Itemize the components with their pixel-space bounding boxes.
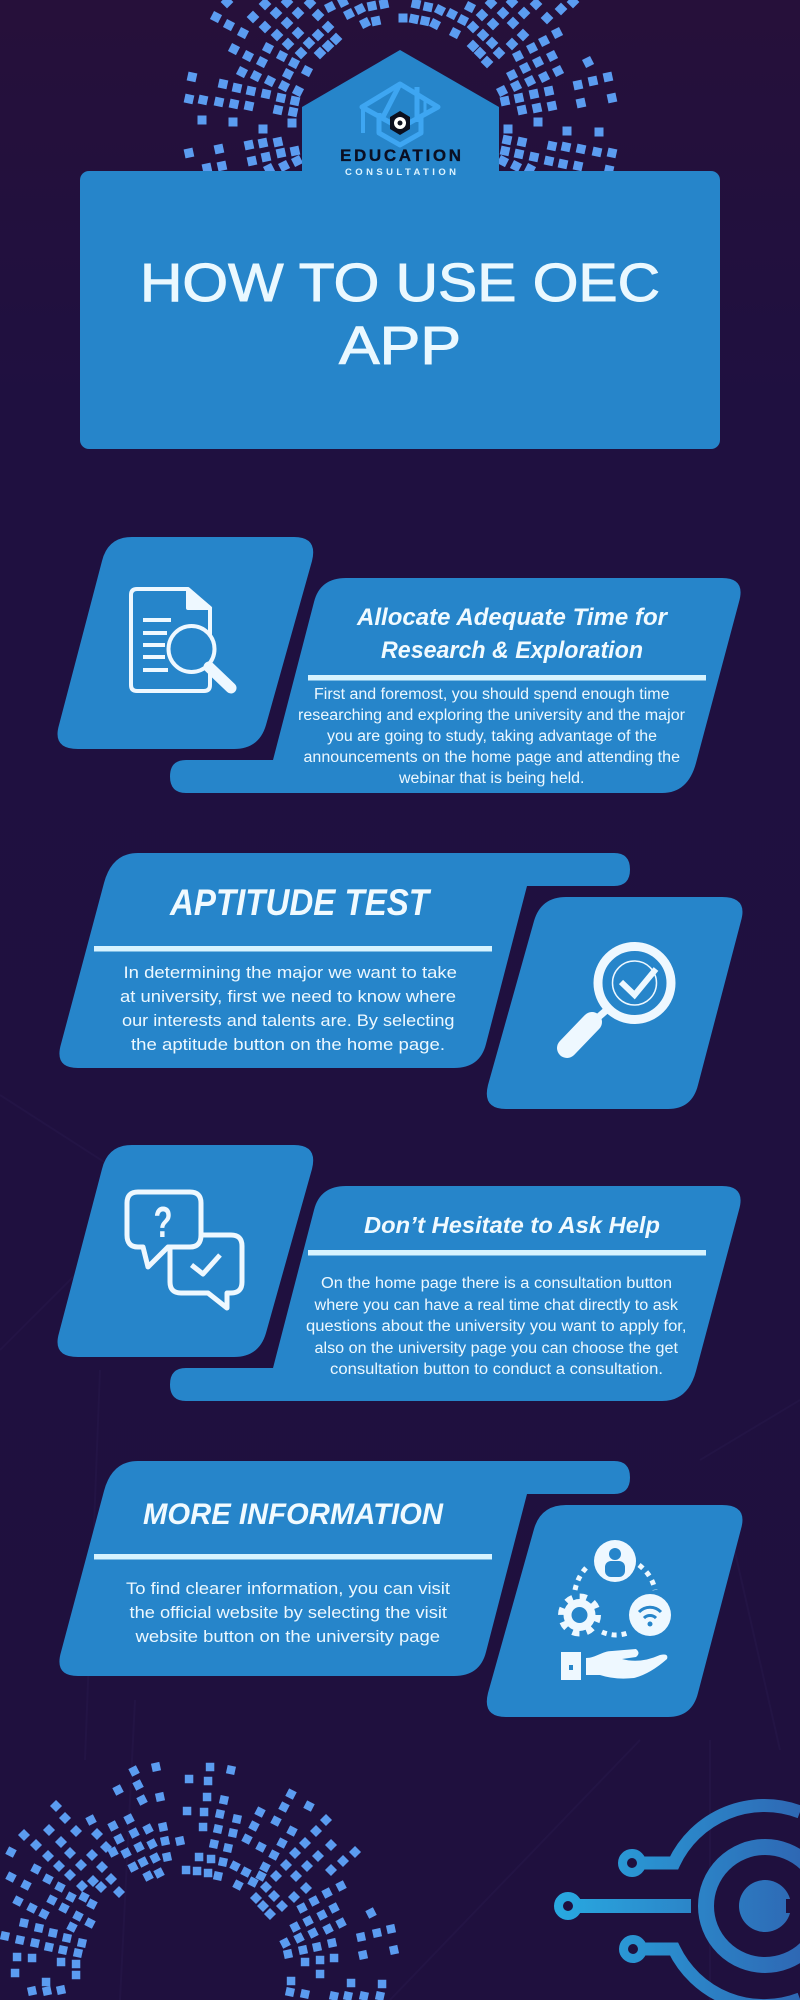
icon panel [58,1145,313,1357]
body text: also on the university page you can choose the get [314,1340,679,1357]
icon panel [487,897,742,1109]
body text: where you can have a real time chat directly to ask [313,1297,678,1314]
body text: On the home page there is a consultation button [321,1275,672,1292]
hand [561,1649,667,1680]
dot pattern: bottom radial [1,1763,395,1997]
icon: chat bubbles: ? [154,1198,172,1247]
divider [94,946,492,952]
text panel [59,853,630,1068]
body text: In determining the major we want to take [124,963,457,982]
body text: researching and exploring the university and the major [298,707,685,724]
body text: our interests and talents are. By selecting [122,1011,454,1030]
icon: chat bubbles [127,1192,242,1308]
title line 1: HOW TO USE OEC [140,253,660,313]
dotted connectors [575,1565,655,1635]
section 3: ask help [58,1145,741,1401]
section 4: more information [59,1461,742,1717]
wifi node [629,1594,671,1636]
text panel [170,578,741,793]
text panel [59,1461,630,1676]
logo wordmark: Education: EDUCATION [340,146,461,165]
dot pattern: top radial [185,0,616,173]
icon: circuit decoration [558,1805,800,2000]
heading: APTITUDE TEST [169,882,432,923]
body text: at university, first we need to know where [120,987,456,1006]
body text [298,686,685,787]
body text: announcements on the home page and attending the [304,749,680,766]
section 1: research [58,537,741,793]
logo house shape [302,50,499,180]
title line 2: APP [339,316,461,376]
body text: questions about the university you want to apply for, [306,1318,686,1335]
icon: magnifier with check [567,946,671,1048]
heading [356,604,669,664]
title background [80,171,720,449]
gear node [562,1597,598,1633]
body text: you are going to study, taking advantage of the [327,728,657,745]
section 2: aptitude test [59,853,742,1109]
logo wordmark: Consultation: CONSULTATION [345,167,456,178]
divider [308,675,706,680]
icon: document search [131,589,231,691]
heading: MORE INFORMATION [143,1498,444,1531]
body text: the official website by selecting the visit [130,1603,447,1622]
title panel [80,171,720,449]
icon: logo hexagon eye [390,111,410,135]
body text: website button on the university page [134,1627,440,1646]
body text [306,1275,686,1378]
body text [126,1579,450,1646]
divider [94,1554,492,1560]
heading: Allocate Adequate Time for [356,604,669,631]
person node [594,1540,636,1582]
body text: webinar that is being held. [398,770,584,787]
icon panel [487,1505,742,1717]
icon panel [58,537,313,749]
icon: network and hand [561,1540,671,1680]
body text: consultation button to conduct a consultation. [330,1361,663,1378]
icon: graduation cap [362,84,438,145]
text panel [170,1186,741,1401]
body text [120,963,457,1054]
heading: Don’t Hesitate to Ask Help [364,1212,660,1238]
body text: To find clearer information, you can visit [126,1579,450,1598]
divider [308,1250,706,1256]
logo badge [302,50,499,180]
body text: First and foremost, you should spend enough time [314,686,670,703]
heading: Research & Exploration [381,637,643,664]
body text: the aptitude button on the home page. [131,1035,445,1054]
